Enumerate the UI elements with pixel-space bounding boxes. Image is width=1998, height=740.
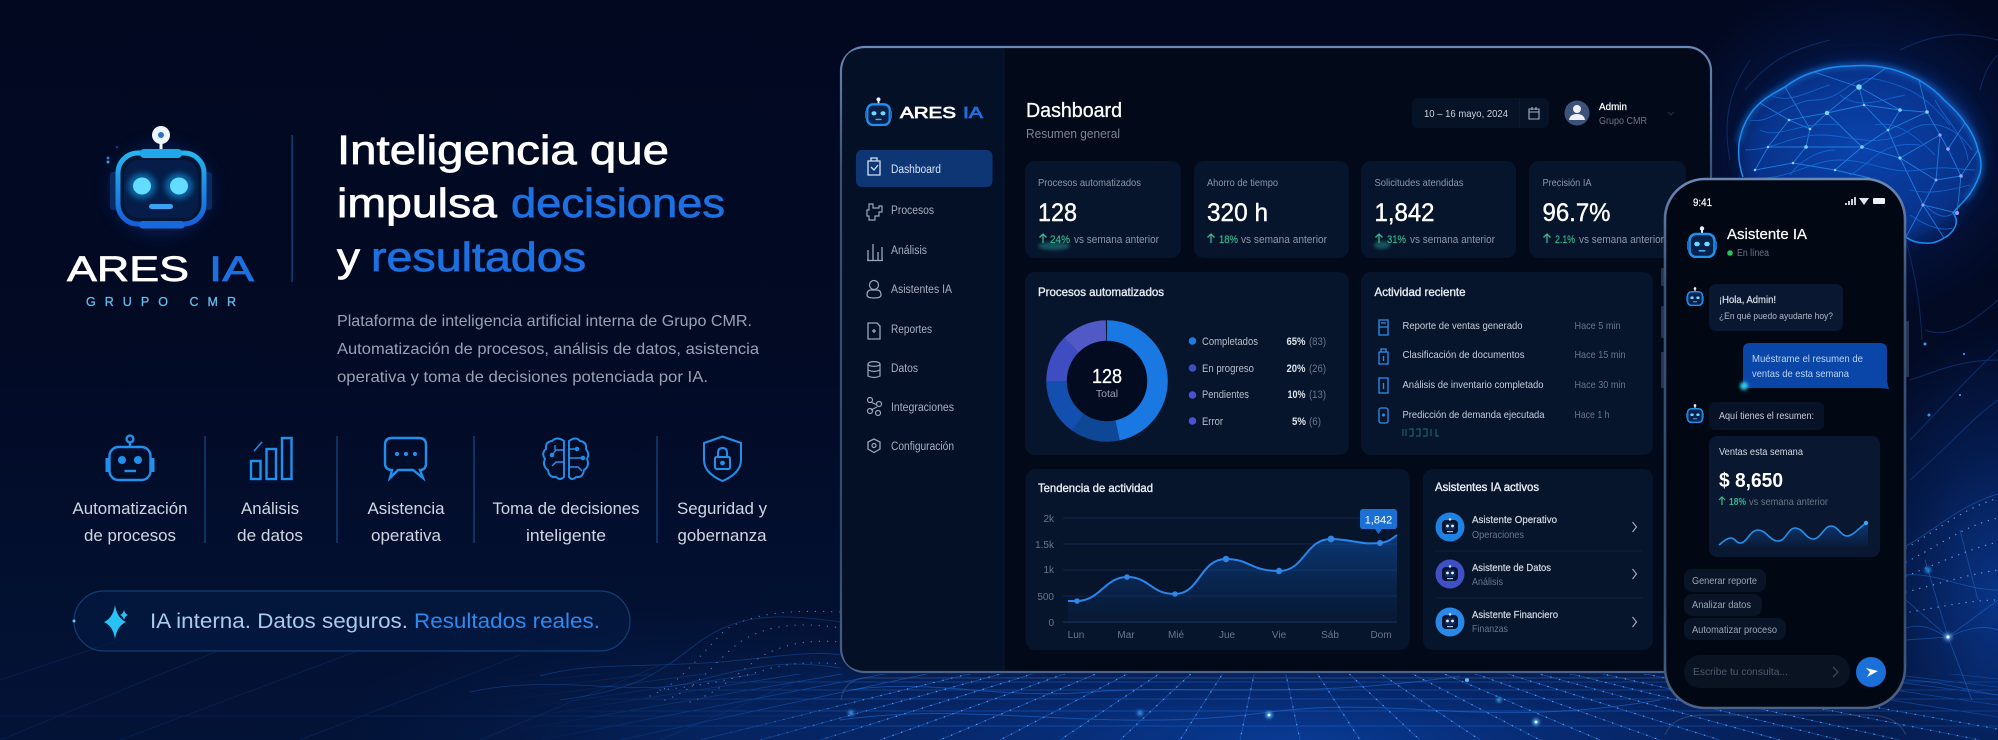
nav: Análisis [867, 244, 927, 260]
legend: error: (6) [1309, 416, 1321, 428]
icon: shield with lock [704, 436, 741, 481]
divider logo/headline [292, 135, 293, 282]
chart y axis: 500 [1037, 592, 1054, 603]
chart y axis: 1.5k [1035, 540, 1055, 551]
dashboard title: Dashboard [1026, 100, 1122, 122]
date picker: 10 – 16 mayo, 2024 [1424, 108, 1508, 120]
feature: seguridad y gobernanza [677, 436, 768, 545]
user profile: Grupo CMR [1599, 116, 1647, 127]
background: brain glow [1742, 63, 1982, 247]
icon: chat bubble [385, 438, 426, 478]
wordmark: ARES [67, 250, 189, 289]
background: network lines right edge [1906, 300, 1998, 700]
KPI: precisión IA: 96.7% [1542, 199, 1610, 227]
assistant: financiero [1436, 608, 1636, 636]
tooltip: 1,842 [1365, 514, 1392, 526]
nav: Reportes [868, 323, 932, 339]
tagline pill [72, 591, 630, 651]
user message [1740, 343, 1889, 390]
brain network illustration [1727, 35, 1998, 340]
legend: error [1189, 416, 1321, 428]
assistant: operativo: Asistente Operativo [1472, 514, 1557, 526]
legend: pendientes: 10% [1288, 389, 1306, 401]
activity row 4 [1379, 408, 1610, 423]
assistant: operativo [1436, 512, 1636, 542]
legend: pendientes: Pendientes [1202, 389, 1249, 401]
activity row 1: Reporte de ventas generado [1402, 320, 1523, 332]
activity row 2: Clasificación de documentos [1402, 349, 1524, 361]
background: perspective grid floor [537, 674, 1998, 740]
headline: decisiones [511, 180, 725, 226]
wordmark accent: IA [209, 250, 255, 289]
KPI: ahorro de tiempo: vs semana anterior [1241, 234, 1327, 246]
feature dividers [205, 436, 657, 543]
status bar [1693, 197, 1885, 209]
sales card: $ 8,650 [1719, 470, 1783, 492]
icon: brain [543, 438, 588, 479]
nav: Configuración: Configuración [891, 441, 954, 453]
nav: Integraciones: Integraciones [891, 402, 954, 414]
panel: asistentes IA activos [1423, 469, 1653, 650]
KPI: solicitudes atendidas: Solicitudes atendidas [1374, 177, 1464, 189]
nav: Análisis: Análisis [891, 245, 927, 257]
message input: Escribe tu consulta... [1693, 666, 1788, 678]
KPI: solicitudes atendidas [1361, 161, 1516, 258]
assistant message 1: ¿En qué puedo ayudarte hoy? [1719, 311, 1833, 322]
activity row 4: Hace 1 h [1574, 409, 1610, 421]
legend: en progreso: (26) [1309, 363, 1326, 375]
label line 2: inteligente [526, 527, 606, 545]
chart x axis: Mié [1168, 630, 1184, 641]
sparkline [1719, 521, 1868, 547]
intro paragraph: Plataforma de inteligencia artificial interna de Grupo CMR. [337, 313, 752, 330]
nav: Datos: Datos [891, 363, 918, 375]
label line 2: gobernanza [678, 527, 767, 545]
assistant: datos: Análisis [1472, 576, 1503, 588]
date picker [1412, 98, 1549, 128]
KPI: ahorro de tiempo: Ahorro de tiempo [1207, 177, 1278, 189]
KPI: solicitudes atendidas: vs semana anterior [1410, 234, 1495, 246]
headline: Inteligencia que [337, 127, 669, 173]
chat header [1687, 226, 1807, 259]
assistant: datos: Asistente de Datos [1472, 562, 1551, 574]
user profile [1564, 100, 1674, 127]
headline: y [337, 234, 361, 280]
panel: procesos automatizados [1025, 272, 1349, 455]
send button [1856, 657, 1886, 687]
chart y axis [1035, 514, 1055, 629]
nav: Asistentes IA: Asistentes IA [891, 284, 952, 296]
phone mockup [1661, 179, 1909, 708]
background: faint floor lines lower left [0, 640, 840, 740]
panel: actividad reciente: Actividad reciente [1374, 285, 1466, 299]
KPI: procesos automatizados [1025, 161, 1181, 258]
tagline accent: Resultados reales. [414, 610, 600, 633]
activity row 2: Hace 15 min [1574, 349, 1626, 361]
KPI: procesos automatizados: 24% [1050, 234, 1070, 246]
assistant message 1: ¡Hola, Admin! [1719, 294, 1776, 306]
chart x axis: Mar [1117, 630, 1135, 641]
chart y axis: 0 [1048, 618, 1054, 629]
activity row 3: Hace 30 min [1574, 379, 1626, 391]
intro paragraph [337, 313, 759, 386]
legend: en progreso [1189, 363, 1326, 375]
headline: impulsa [337, 180, 497, 226]
sidebar logo [865, 97, 983, 125]
KPI: procesos automatizados: 128 [1038, 199, 1077, 227]
message input [1684, 655, 1850, 688]
assistant: financiero: Finanzas [1472, 623, 1508, 635]
KPI: ahorro de tiempo [1194, 161, 1349, 258]
activity row 4: Predicción de demanda ejecutada [1402, 409, 1545, 421]
feature: análisis de datos [237, 438, 303, 545]
KPI: precisión IA [1529, 161, 1686, 258]
logo: ARES IA [67, 126, 255, 309]
chart x axis: Lun [1068, 630, 1084, 641]
panel: actividad reciente [1361, 272, 1653, 455]
KPI: solicitudes atendidas: 1,842 [1374, 199, 1434, 227]
quick reply chips: Generar reporte [1692, 576, 1757, 587]
sales card: 18% [1729, 496, 1747, 508]
nav: Procesos [867, 204, 934, 220]
nav: Integraciones [868, 398, 954, 416]
sidebar logo: IA [963, 105, 983, 122]
icon: bar chart [251, 438, 292, 479]
KPI: precisión IA: vs semana anterior [1579, 234, 1664, 246]
intro paragraph: Automatización de procesos, análisis de datos, asistencia [337, 341, 759, 358]
reflections of devices on the floor [841, 678, 1906, 735]
nav: Procesos: Procesos [891, 205, 934, 217]
tagline text: IA interna. Datos seguros. [150, 610, 408, 633]
label line 2: operativa [371, 527, 442, 545]
chart x axis: Sáb [1321, 630, 1339, 641]
tablet dashboard [841, 47, 1711, 672]
sales card [1709, 436, 1880, 557]
panel: sidebar [842, 48, 1004, 671]
legend: en progreso: 20% [1286, 363, 1306, 375]
headline: resultados [371, 234, 586, 280]
KPI: procesos automatizados: Procesos automatizados [1038, 177, 1141, 189]
activity row 3 [1379, 378, 1626, 393]
dashboard subtitle: Resumen general [1026, 126, 1120, 141]
legend: pendientes: (13) [1309, 389, 1326, 401]
quick reply chips [1684, 569, 1786, 640]
label: Toma de decisiones [492, 500, 640, 518]
quick reply chips: Automatizar proceso [1692, 625, 1777, 636]
label line 2: de datos [237, 527, 303, 545]
quick reply chips: Analizar datos [1692, 600, 1751, 611]
user profile: Admin [1599, 101, 1627, 113]
KPI: solicitudes atendidas: 31% [1387, 234, 1406, 246]
chat header: En línea [1737, 248, 1769, 259]
sales card: vs semana anterior [1749, 496, 1828, 508]
icon: robot mascot [106, 126, 213, 236]
legend: pendientes [1189, 389, 1326, 401]
feature: automatización de procesos [72, 436, 188, 545]
KPI: ahorro de tiempo: 320 h [1207, 199, 1268, 227]
legend: en progreso: En progreso [1202, 363, 1254, 375]
activity row 3: Análisis de inventario completado [1402, 379, 1544, 391]
tooltip [1360, 509, 1397, 534]
label: Análisis [241, 500, 299, 518]
icon: sparkle [104, 605, 128, 639]
legend: completados [1189, 336, 1326, 348]
line chart [1068, 535, 1397, 622]
activity row 2 [1379, 349, 1626, 364]
intro paragraph: operativa y toma de decisiones potenciada por IA. [337, 369, 708, 386]
chart x axis: Dom [1370, 630, 1392, 641]
label: Automatización [72, 500, 188, 518]
assistant: datos [1436, 560, 1636, 588]
donut centre label: Total [1096, 388, 1118, 400]
label line 2: de procesos [84, 527, 176, 545]
panel: asistentes IA activos: Asistentes IA activos [1435, 480, 1539, 494]
user message: Muéstrame el resumen de [1752, 353, 1863, 365]
legend: error: Error [1202, 416, 1223, 428]
KPI: precisión IA: Precisión IA [1542, 177, 1592, 189]
donut chart [1056, 330, 1158, 431]
bright grid nodes [848, 678, 1539, 725]
nav: Reportes: Reportes [891, 324, 932, 336]
headline [337, 127, 725, 280]
nav: Dashboard (active) [856, 150, 992, 187]
activity row 1: Hace 5 min [1574, 320, 1621, 332]
donut centre value: 128 [1092, 366, 1122, 388]
chat header: Asistente IA [1727, 226, 1807, 243]
nav: Asistentes IA [867, 280, 952, 298]
chart y axis: 1k [1043, 565, 1055, 576]
chart x axis: Jue [1219, 630, 1235, 641]
nav: Dashboard (active): Dashboard [891, 164, 941, 176]
label: Asistencia [368, 500, 445, 518]
activity row 1 [1379, 320, 1621, 335]
KPI: procesos automatizados: vs semana anterior [1074, 234, 1159, 246]
legend: error: 5% [1292, 416, 1306, 428]
panel: tendencia de actividad: Tendencia de actividad [1038, 481, 1153, 495]
panel: procesos automatizados: Procesos automatizados [1038, 285, 1164, 299]
assistant: operativo: Operaciones [1472, 529, 1524, 541]
sidebar logo: ARES [900, 105, 956, 122]
assistant message 2 [1686, 402, 1824, 430]
icon: robot [107, 436, 153, 480]
user message: ventas de esta semana [1752, 368, 1849, 380]
assistant message 1 [1686, 284, 1843, 331]
panel: tendencia de actividad [1026, 469, 1410, 650]
nav: Configuración [868, 439, 954, 453]
assistant message 2: Aquí tienes el resumen: [1719, 411, 1814, 422]
status bar: 9:41 [1693, 197, 1712, 209]
nav: Datos [868, 362, 918, 378]
chart x axis [1068, 630, 1392, 641]
legend: completados: Completados [1202, 336, 1258, 348]
sub-brand: GRUPO CMR [86, 295, 236, 309]
feature: toma de decisiones [492, 438, 640, 545]
label: Seguridad y [677, 500, 768, 518]
assistant: financiero: Asistente Financiero [1472, 609, 1558, 621]
feature: asistencia operativa [368, 438, 445, 545]
KPI: precisión IA: 2.1% [1555, 234, 1575, 246]
sales card: Ventas esta semana [1719, 446, 1803, 458]
background: dotted wave mesh lower left [470, 611, 841, 702]
chart y axis: 2k [1043, 514, 1055, 525]
legend: completados: 65% [1286, 336, 1306, 348]
legend: completados: (83) [1309, 336, 1326, 348]
chart x axis: Vie [1272, 630, 1287, 641]
KPI: ahorro de tiempo: 18% [1219, 234, 1238, 246]
